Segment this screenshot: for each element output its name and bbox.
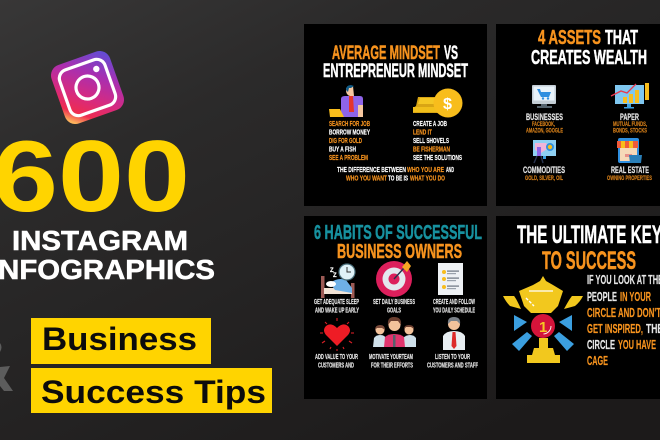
- text: commodities: [523, 165, 565, 182]
- text: difference quote: THE DIFFERENCE BETWEEN: [337, 165, 406, 174]
- heading: habits title: 6 HABITS OF SUCCESSFUL: [314, 221, 482, 244]
- icon: team of three: [373, 317, 416, 347]
- heading: instagram infographics: [0, 225, 215, 285]
- panel: 4 assets: [496, 24, 660, 206]
- heading: mindset title: VS: [444, 43, 458, 64]
- text: average mindset list: SEARCH FOR JOB: [329, 119, 370, 128]
- text: businesses: FACEBOOK,: [532, 121, 555, 128]
- text: sleep habit: GET ADEQUATE SLEEP: [314, 297, 359, 306]
- heading: habits title: [314, 221, 482, 263]
- text: schedule habit: YOU DAILY SCHEDULE: [433, 306, 475, 314]
- heading: assets title: [531, 26, 647, 69]
- label: success tips: [31, 368, 272, 413]
- icon: man with tie: [443, 317, 465, 350]
- text: paper: PAPER: [620, 112, 639, 122]
- text: difference quote: AND: [446, 165, 454, 174]
- icon: target with arrow: [376, 261, 412, 297]
- text: add value habit: [315, 352, 358, 370]
- text: listen habit: CUSTOMERS AND STAFF: [427, 360, 478, 370]
- icon: commodities screen: [533, 140, 556, 163]
- icon: instagram logo: [48, 48, 127, 127]
- heading: ultimate key title: [517, 221, 660, 275]
- label: business: [31, 318, 211, 364]
- text: listen habit: LISTEN TO YOUR: [435, 352, 470, 361]
- text: sleep habit: [314, 297, 359, 314]
- text: difference quote: [337, 165, 454, 182]
- icon: bed and clock: Z: [330, 268, 334, 274]
- icon: real estate shop: [617, 138, 642, 163]
- heading: habits title: BUSINESS OWNERS: [337, 240, 462, 263]
- text: add value habit: CUSTOMERS AND: [318, 360, 354, 370]
- text: entrepreneur mindset list: BE FISHERMAN: [413, 144, 450, 154]
- text: entrepreneur mindset list: CREATE A JOB: [413, 119, 447, 128]
- heading: assets title: 4 ASSETS: [538, 26, 601, 49]
- text: entrepreneur mindset list: LEND IT: [413, 128, 432, 136]
- text: difference quote: WHAT YOU DO: [410, 174, 445, 182]
- panel: ultimate key to success: [496, 216, 660, 399]
- heading: mindset title: AVERAGE MINDSET: [332, 43, 440, 64]
- panel: 6 habits: [304, 216, 487, 399]
- text: average mindset list: SEE A PROBLEM: [329, 153, 368, 162]
- text: goals habit: [373, 297, 415, 314]
- text: real estate: [607, 165, 652, 182]
- text: listen habit: [427, 352, 478, 370]
- text: entrepreneur mindset list: SELL SHOVELS: [413, 136, 449, 145]
- icon: trophy with medal: [503, 276, 583, 363]
- text: commodities: COMMODITIES: [523, 165, 565, 175]
- text: motivate habit: MOTIVATE YOURTEAM: [369, 352, 413, 361]
- text: goals habit: SET DAILY BUSINESS: [373, 297, 415, 306]
- panel: average vs entrepreneur mindset: [304, 24, 487, 206]
- text: schedule habit: CREATE AND FOLLOW: [433, 297, 475, 306]
- heading: mindset title: [323, 43, 468, 82]
- text: average mindset list: BUY A FISH: [329, 144, 356, 154]
- text: circle quote: PEOPLE: [587, 290, 617, 304]
- text: paper: [613, 112, 647, 134]
- icon: businessman at laptop: [329, 85, 363, 117]
- icon: glowing heart: [320, 318, 354, 351]
- icon: gold coin and bars: [413, 88, 462, 118]
- icon: bed and clock: [321, 264, 355, 298]
- text: average mindset list: DIG FOR GOLD: [329, 136, 362, 145]
- text: add value habit: ADD VALUE TO YOUR: [315, 352, 358, 361]
- text: circle quote: [587, 273, 660, 368]
- text: motivate habit: FOR THEIR EFFORTS: [371, 360, 413, 370]
- text: difference quote: TO BE IS: [388, 174, 408, 182]
- text: average mindset list: [329, 119, 370, 162]
- text: sleep habit: AND WAKE UP EARLY: [315, 306, 359, 314]
- text: circle quote: CIRCLE: [587, 338, 615, 352]
- text: motivate habit: [369, 352, 413, 370]
- text: entrepreneur mindset list: SEE THE SOLUTIONS: [413, 153, 462, 162]
- label: success tips: Success Tips: [41, 374, 266, 410]
- icon: rising bar chart: [611, 83, 649, 108]
- text: difference quote: WHO YOU WANT: [346, 174, 387, 182]
- heading: assets title: THAT: [605, 26, 638, 49]
- icon: faded grey ampersand: [0, 343, 13, 391]
- text: commodities: GOLD, SILVER, OIL: [525, 175, 563, 182]
- text: entrepreneur mindset list: [413, 119, 462, 162]
- icon: trophy with medal: 1: [539, 319, 547, 336]
- text: average mindset list: BORROW MONEY: [329, 128, 370, 136]
- heading: instagram infographics: INSTAGRAM: [12, 225, 188, 256]
- text: difference quote: WHO YOU ARE: [407, 165, 444, 174]
- text: schedule habit: [433, 297, 475, 314]
- icon: shopping monitor: [532, 85, 556, 108]
- heading: mindset title: ENTREPRENEUR MINDSET: [323, 61, 468, 82]
- text: businesses: [526, 112, 563, 134]
- icon: gold coin and bars: $: [443, 96, 452, 113]
- text: circle quote: CAGE: [587, 354, 608, 368]
- icon: checklist: [438, 263, 463, 295]
- text: businesses: AMAZON, GOOGLE: [526, 128, 563, 134]
- label: business: Business: [42, 321, 197, 357]
- text: goals habit: GOALS: [387, 306, 401, 314]
- icon: bed and clock: Z: [333, 273, 337, 279]
- text: businesses: BUSINESSES: [526, 112, 563, 122]
